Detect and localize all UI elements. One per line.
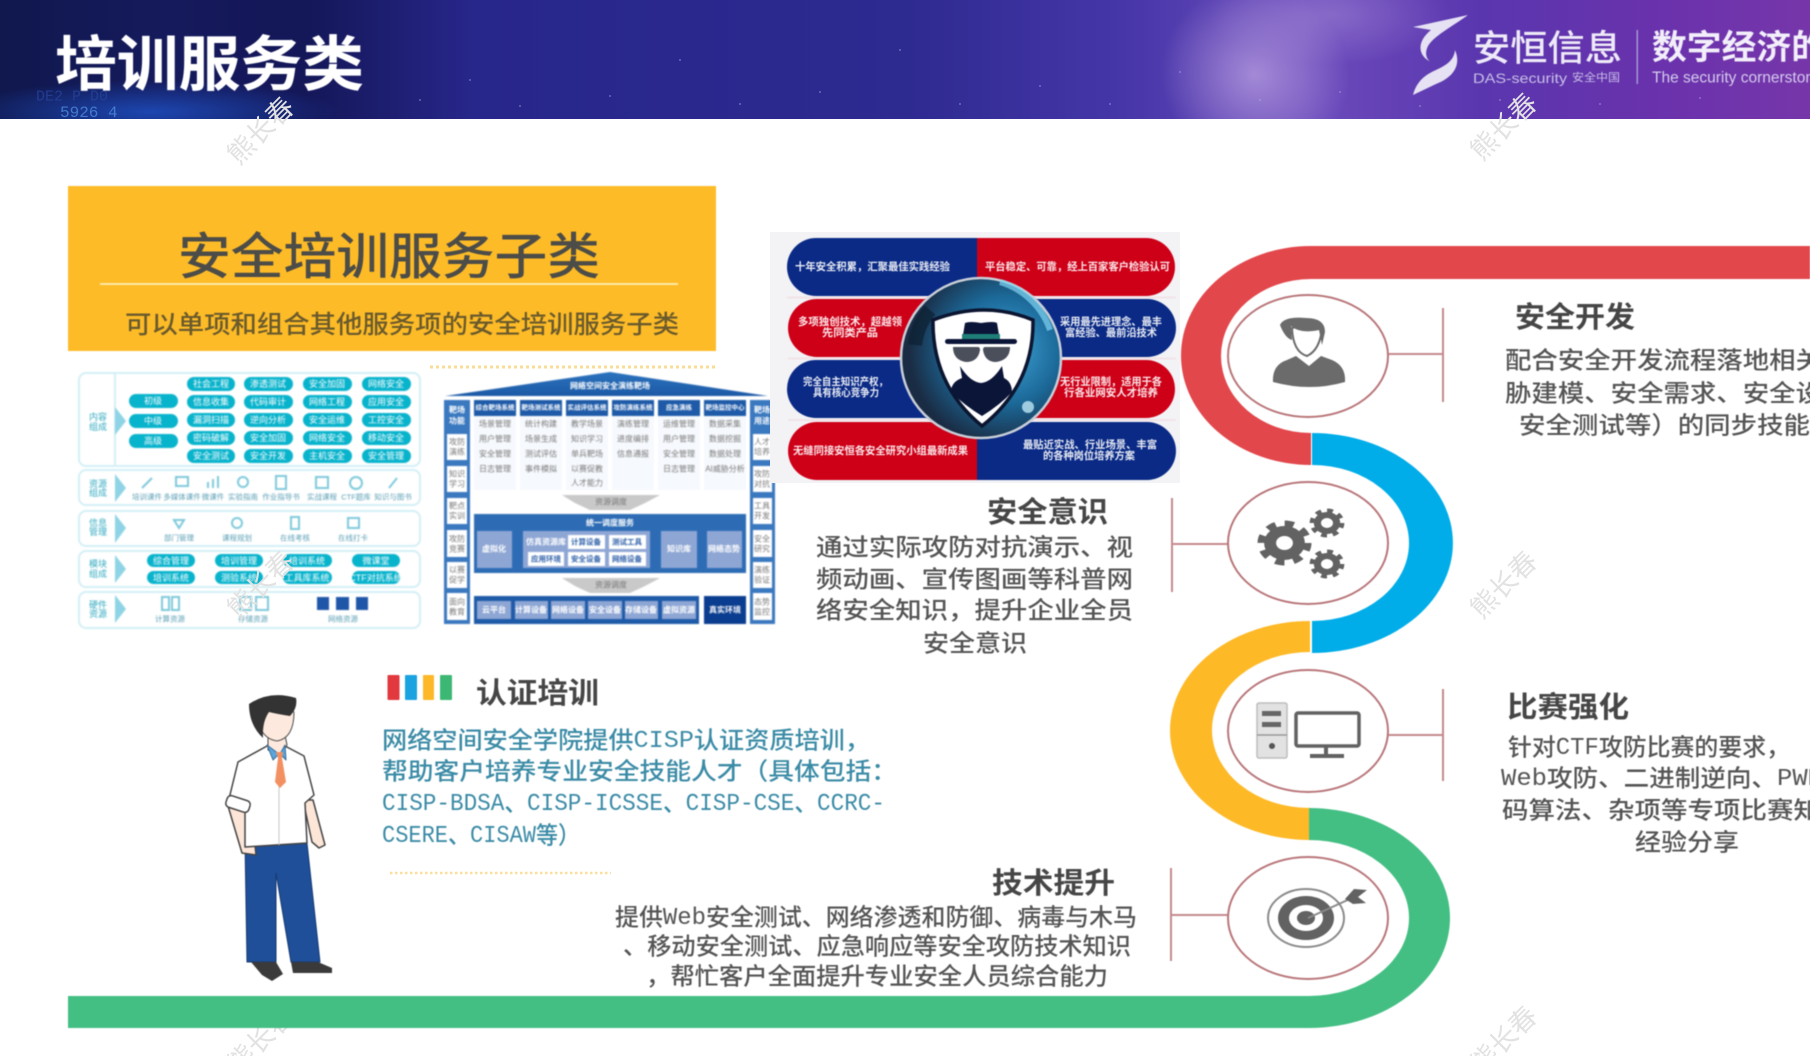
chart: cyber range architecture: 综合靶场系统 [476,402,515,412]
body: CISP-BDSA、CISP-ICSSE、CISP-CSE、CCRC- [382,790,885,818]
tie [275,752,286,788]
chart: cyber range architecture: 存储设备 [625,604,657,614]
text: security development [1505,301,1810,440]
chart: training content architecture: 中级 [144,415,162,426]
icon: colour bars [388,675,452,700]
chart: cyber range architecture: 以赛促教 [571,464,603,474]
chart: training content architecture: 硬件 [89,599,107,610]
text: technical improvement: 技术提升 [992,867,1115,900]
chart: training content architecture: 作业指导书 [262,492,300,502]
icon: person [1273,318,1345,387]
chart: cyber range architecture: 虚拟化 [482,544,506,554]
panel: advantages badge: 采用最先进理念、最丰 [1060,315,1162,328]
chart: training content architecture: 初级 [144,395,162,406]
hair [249,695,296,738]
panel: yellow subcategory banner [68,186,716,351]
chart: training content architecture: 知识与图书 [374,492,412,502]
chart: cyber range architecture: 用途 [754,416,770,426]
chart: training content architecture: 培训课件 [132,492,162,502]
chart: training content architecture: 高级 [144,435,162,446]
chart: cyber range architecture: 教育 [449,606,465,616]
chart: cyber range architecture: 统计构建 [525,418,557,428]
chart: cyber range architecture: 事件模拟 [525,464,557,474]
chart: cyber range architecture: 单兵靶场 [571,448,603,458]
dotted divider: lower [390,872,611,874]
chart: training content architecture: 安全加固 [309,378,345,389]
chart: training content architecture: 网络工程 [309,396,345,407]
chart: cyber range architecture: 计算设备 [571,536,601,546]
chart: training content architecture: 网络资源 [328,614,358,624]
chart: cyber range architecture: 学习 [449,478,465,488]
icon: target [1268,889,1367,947]
chart: cyber range architecture: 培养 [754,446,770,456]
chart: cyber range architecture: 对抗 [754,478,770,488]
chart: training content architecture: 组成 [89,568,107,579]
text: security development: 胁建模、安全需求、安全设 [1505,380,1810,408]
chart: cyber range architecture: 知识库 [667,544,691,554]
row 3 [787,360,1175,418]
chart: training content architecture: 安全管理 [368,450,404,461]
collar [267,745,286,760]
icon: computer [1257,703,1359,758]
chart: cyber range architecture: 运维管理 [663,418,695,428]
chart: cyber range architecture: 统一调度服务 [586,518,634,528]
chart: cyber range architecture: 场景管理 [479,418,511,428]
chart: cyber range architecture: 资源调度 [595,496,627,506]
chart: training content architecture: 培训系统 [153,572,189,583]
panel: advantages badge: 富经验、最前沿技术 [1065,326,1157,339]
chart: cyber range architecture: 研究 [754,544,770,554]
text: security awareness [816,496,1133,658]
chart: training content architecture: 综合管理 [153,555,189,566]
chart: cyber range architecture: 靶场监控中心 [706,402,745,412]
chart: training content architecture: 计算资源 [155,614,185,624]
text: security awareness: 频动画、宣传图画等科普网 [816,566,1133,594]
text: security development: 安全开发 [1515,301,1635,334]
row 1 [787,238,1175,296]
panel: advantages badge: 多项独创技术，超越领 [798,315,902,328]
chart: training content architecture: 资源 [89,479,107,489]
chart: training content architecture: 安全测试 [193,450,229,461]
chart: cyber range architecture: 开发 [754,510,770,520]
panel: advantages badge: 完全自主知识产权， [803,375,888,388]
chart: cyber range architecture: 用户管理 [479,434,511,444]
step: technical improvement icon [1171,857,1388,979]
chart: cyber range architecture: 数据挖掘 [709,434,741,444]
step: security development icon [1228,295,1443,417]
text: technical improvement: 提供Web安全测试、网络渗透和防御、病毒与木马 [615,904,1137,932]
header banner: DE2 P D0 [36,88,108,106]
heading: 安全培训服务子类 [178,229,600,285]
chart: cyber range architecture: 攻防 [449,436,465,446]
panel: advantages badge: 无行业限制，适用于各 [1060,375,1162,388]
panel: advantages badge: 具有核心竞争力 [813,386,879,399]
chart: training content architecture: 安全加固 [250,432,286,443]
chart: training content architecture: 部门管理 [164,532,194,542]
heading: 认证培训 [476,677,599,710]
text: technical improvement [615,867,1137,990]
text: competition training: 比赛强化 [1507,691,1629,724]
panel: advantages badge [770,232,1180,483]
chart: cyber range architecture: 应急演练 [666,402,692,412]
chart: cyber range architecture: 监控 [754,606,770,616]
text: competition training: 码算法、杂项等专项比赛知 [1502,798,1810,824]
chart: training content architecture: 安全开发 [250,450,286,461]
chart: training content architecture: 管理 [89,526,107,537]
chart: cyber range architecture: 攻防 [754,468,770,478]
panel: advantages badge: 先同类产品 [822,326,878,339]
watermark: over diagram: 熊长春 [222,546,300,624]
chart: cyber range architecture: 网络态势 [708,544,740,554]
chart: cyber range architecture: 信息通报 [617,448,649,458]
logo: company mark: 安全中国 [1572,70,1620,84]
chart: training content architecture: 安全运维 [309,414,345,425]
watermarks [222,88,1543,1056]
chart: training content architecture: 微课堂 [362,555,390,566]
chart: training content architecture: 信息 [89,517,107,528]
chart: cyber range architecture: 安全管理 [479,448,511,458]
chart: cyber range architecture: 演练管理 [617,418,649,428]
chart: training content architecture: CTF题库 [341,492,371,502]
chart: training content architecture: 课程规划 [222,532,252,542]
shirt [228,746,314,847]
chart: cyber range architecture: 网络空间安全演练靶场 [570,380,650,390]
logo subtitle: DAS-security [1473,70,1567,86]
chart: cyber range architecture: 教学场景 [571,418,603,428]
icon: shield agent [901,278,1061,438]
dotted divider: top [430,366,717,368]
right arm [303,800,325,848]
text: competition training: 针对CTF攻防比赛的要求， [1508,734,1790,762]
chart: cyber range architecture: 资源调度 [595,580,627,590]
text: security awareness: 络安全知识，提升企业全员 [816,598,1133,624]
chart: training content architecture: 存储资源 [238,614,268,624]
S-curve: yellow segment [1170,621,1310,840]
chart: training content architecture: 漏洞扫描 [193,414,229,425]
S-curve: red segment [1181,246,1810,465]
chart: cyber range architecture: 数据处理 [709,448,741,458]
chart: training content architecture: 培训系统 [289,555,325,566]
chart: training content architecture: 模块 [89,558,107,569]
chart: cyber range architecture: 数据采集 [709,418,741,428]
chart: cyber range architecture: 攻防演练系统 [614,402,653,412]
neck and face [268,730,287,755]
block: certification training [382,675,897,850]
shoes [251,962,283,981]
panel: advantages badge: 十年安全积累，汇聚最佳实践经验 [795,260,950,273]
chart: cyber range architecture: 靶场 [754,404,770,414]
chart: cyber range architecture: 靶点 [449,500,465,510]
S-curve: green segment [68,808,1450,1028]
watermarks: 熊长春 [222,92,300,170]
roof [445,372,768,396]
chart: cyber range architecture: 日志管理 [479,464,511,474]
chart: cyber range architecture: 安全 [754,534,770,544]
chart: training content architecture: 渗透测试 [250,378,286,389]
illustration: standing man [225,695,332,981]
chart: training content architecture: 网络安全 [309,432,345,443]
chart: cyber range architecture: 计算设备 [515,604,547,614]
chart: training content architecture: 网络安全 [368,378,404,389]
watermarks: 熊长春 [1465,88,1543,166]
chart: cyber range architecture: 网络设备 [552,604,584,614]
text: security awareness: 安全意识 [987,496,1108,529]
row 2 [788,299,1176,357]
chart: cyber range architecture: 日志管理 [663,464,695,474]
text: technical improvement: ，帮忙客户全面提升专业安全人员综合能力 [646,964,1108,990]
chart: training content architecture: 应用安全 [368,396,404,407]
chart: cyber range architecture: 应用环境 [531,554,561,564]
chart: training content architecture: 实战课程 [307,492,337,502]
body: 帮助客户培养专业安全技能人才（具体包括： [382,758,897,786]
chart: cyber range architecture: 实战评估系统 [568,402,607,412]
logo: company mark [1413,15,1810,95]
chart: training content architecture: 微课件 [202,492,225,502]
chart: training content architecture: 社会工程 [193,378,229,389]
chart: training content architecture: 资源 [89,609,107,619]
panel: advantages badge: 的各种岗位培养方案 [1043,449,1135,462]
body: 网络空间安全学院提供 CISP认证资质培训， [382,728,870,754]
logo text: 安恒信息 [1473,28,1622,68]
chart: training content architecture: 密码破解 [193,432,229,443]
chart: cyber range architecture: 以赛 [449,564,465,574]
chart: cyber range architecture: 虚拟资源 [663,604,695,614]
chart: cyber range architecture: 仿真资源库 [526,536,566,546]
chart: cyber range architecture: 测试工具 [612,536,642,546]
chart: training content architecture: 在线考核 [280,532,310,542]
chart: training content architecture: 培训管理 [221,555,257,566]
panel: advantages badge: 平台稳定、可靠，经上百家客户检验认可 [985,260,1170,273]
chart: cyber range architecture: 人才能力 [571,478,603,488]
chart: cyber range architecture: 靶场测试系统 [522,402,561,412]
chart: cyber range architecture: 云平台 [482,604,506,614]
panel: advantages badge: 行各业网安人才培养 [1064,386,1158,399]
chart: training content architecture: 测验系统 [221,572,257,583]
chart: cyber range architecture: 用户管理 [663,434,695,444]
step: security awareness icon [1172,482,1388,604]
legs [245,843,320,962]
chart: training content architecture: 在线打卡 [338,532,368,542]
chart: training content architecture: 逆向分析 [250,414,286,425]
header banner [0,0,1810,119]
chart: training content architecture: 组成 [89,487,107,498]
text: security development: 配合安全开发流程落地相关 [1505,348,1810,374]
row 4 [788,422,1176,480]
chart: cyber range architecture: 演练 [449,446,465,456]
chart: cyber range architecture: 靶场 [449,404,465,414]
text: competition training: 经验分享 [1635,830,1739,856]
subheading: 可以单项和组合其他服务项的安全培训服务子类 [125,311,679,339]
chart: cyber range architecture: 促学 [449,574,465,584]
chart: cyber range architecture: 演练 [754,564,770,574]
text: competition training [1501,691,1810,856]
panel: advantages badge: 无缝同接安恒各安全研究小组最新成果 [793,444,968,457]
chart: cyber range architecture: 竞赛 [449,544,465,554]
chart: cyber range architecture: 面向 [449,596,465,606]
chart: training content architecture: 移动安全 [368,432,404,443]
chart: cyber range architecture: 知识学习 [571,434,603,444]
chart: training content architecture: 信息收集 [193,396,229,407]
chart: cyber range architecture: 场景生成 [525,434,557,444]
header banner: 5926 4 [60,104,118,122]
chart: training content architecture: 实验指南 [228,492,258,502]
chart: cyber range architecture: AI威胁分析 [705,464,745,474]
chart: training content architecture: 组成 [89,421,107,432]
chart: cyber range architecture: 态势 [754,596,770,606]
chart: cyber range architecture: 功能 [449,416,465,426]
watermarks: 熊长春 [1465,546,1543,624]
chart: training content architecture: 多媒体课件 [163,492,201,502]
chart: cyber range architecture: 安全管理 [663,448,695,458]
icon: gears [1262,511,1341,576]
chart: training content architecture: CTF对抗系统 [349,572,403,583]
chart: cyber range architecture: 安全设备 [571,554,601,564]
chart: cyber range architecture: 真实环境 [709,604,741,614]
title: 培训服务类 [55,32,364,98]
left arm [228,800,256,855]
chart: cyber range architecture: 验证 [754,574,770,584]
panel: advantages badge: 最贴近实战、行业场景、丰富 [1023,438,1157,451]
chart: cyber range architecture: 人才 [754,436,770,446]
text: technical improvement: 、移动安全测试、应急响应等安全攻防技术知识 [623,934,1131,960]
chart: cyber range architecture: 实训 [449,510,465,520]
chart: cyber range architecture [444,372,775,624]
chart: cyber range architecture: 网络设备 [612,554,642,564]
S-curve: blue segment [1312,433,1453,653]
chart: training content architecture: 工具库系统 [284,572,330,583]
chart: cyber range architecture: 知识 [449,468,465,478]
chart: cyber range architecture: 攻防 [449,534,465,544]
text: security development: 安全测试等）的同步技能 [1519,412,1810,440]
chart: cyber range architecture: 测试评估 [525,448,557,458]
chart: cyber range architecture: 安全设备 [589,604,621,614]
text: security awareness: 通过实际攻防对抗演示、视 [816,534,1133,562]
chart: training content architecture: 工控安全 [368,414,404,425]
text: security awareness: 安全意识 [923,630,1027,658]
body: CSERE、CISAW等） [382,822,580,850]
chart: training content architecture: 代码审计 [250,396,286,407]
chart: cyber range architecture: 进度编排 [617,434,649,444]
chart: training content architecture: 主机安全 [309,450,345,461]
icon: swoosh [1413,15,1468,95]
body [382,728,897,850]
chart: training content architecture: 内容 [89,411,107,422]
chart: cyber range architecture: 工具 [754,502,770,510]
step: competition icon [1228,670,1443,792]
chart: training content architecture [79,373,420,628]
